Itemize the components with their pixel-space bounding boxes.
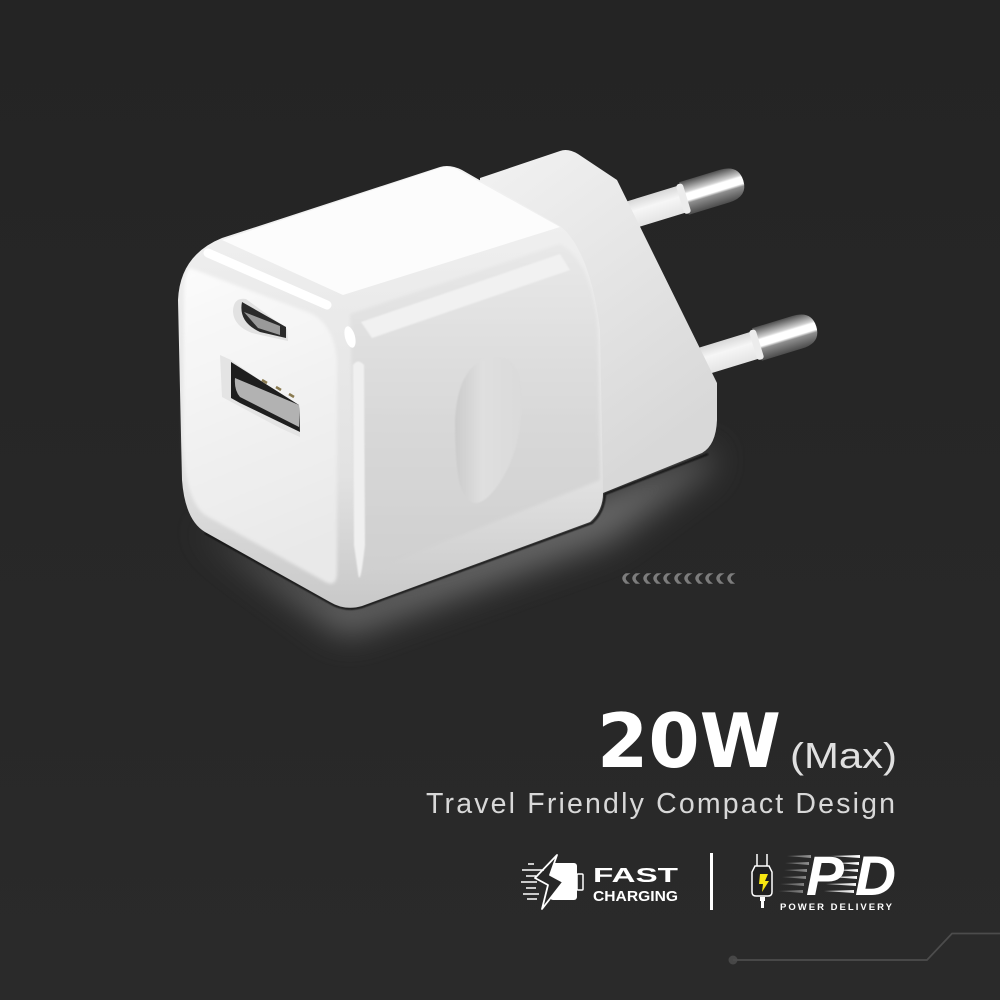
glow under charger [195, 450, 712, 635]
subtitle: Travel Friendly Compact Design [426, 788, 895, 820]
label: CHARGING: CHARGING [593, 888, 678, 905]
icon: battery and bolt [521, 855, 583, 909]
icon: plug [752, 854, 772, 908]
chevron row [623, 574, 733, 583]
label: D: D [855, 844, 896, 907]
heading: 20W: 20W [597, 697, 781, 785]
back plate [480, 150, 717, 493]
USB-A port [220, 355, 300, 437]
heading: (Max): (Max) [790, 735, 897, 776]
top pin [616, 164, 748, 234]
shadow edge [205, 454, 708, 609]
speed lines [778, 855, 860, 893]
label: FAST: FAST [593, 864, 679, 887]
badge: power delivery [752, 844, 896, 913]
divider [710, 853, 713, 910]
oval indent [455, 356, 522, 503]
side top highlight [361, 254, 570, 338]
side face [350, 244, 600, 578]
charger product image [178, 150, 821, 609]
body silhouette [178, 166, 603, 608]
USB-C port [233, 299, 288, 341]
badge: fast charging [521, 855, 679, 909]
label: P: P [806, 844, 845, 907]
bottom pin [689, 310, 821, 380]
corner highlight [342, 325, 358, 349]
circuit line [728, 934, 1000, 964]
label: POWER DELIVERY: POWER DELIVERY [780, 902, 893, 913]
vertical highlight [353, 362, 365, 578]
front top highlight [208, 253, 327, 305]
top face [222, 167, 560, 295]
front face [183, 268, 337, 584]
